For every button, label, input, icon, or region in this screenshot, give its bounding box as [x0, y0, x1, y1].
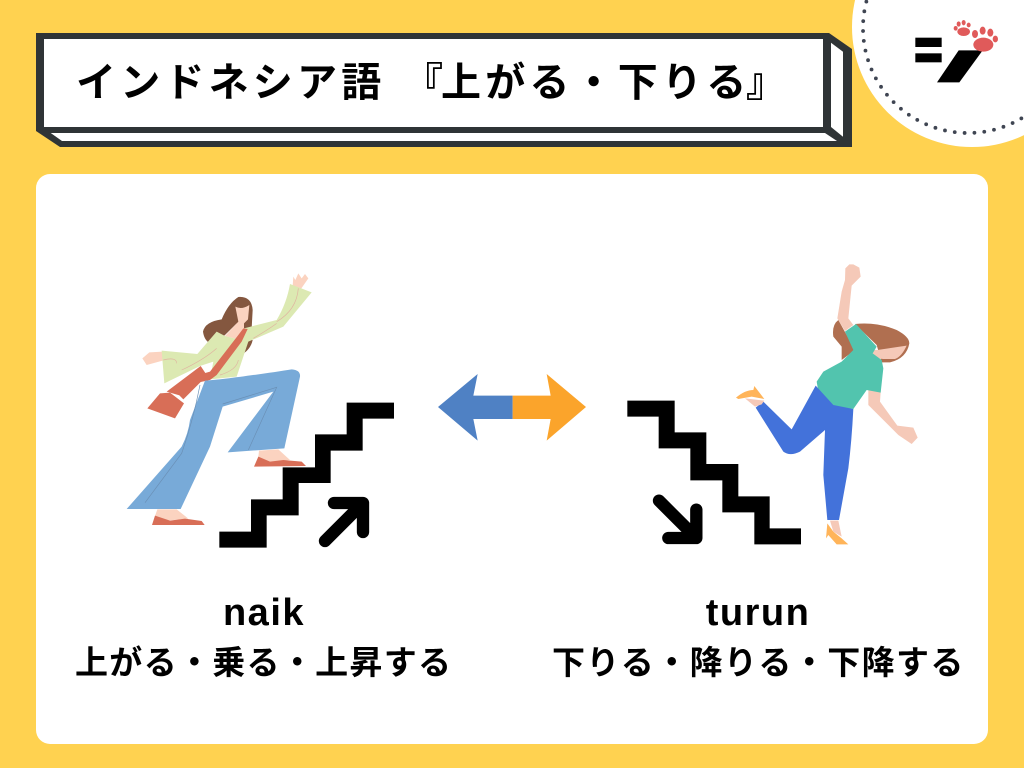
- label: naik: naik: [223, 592, 305, 634]
- meaning: turun: 下りる・降りる・下降する: [552, 644, 965, 681]
- logo badge: [852, 0, 1024, 147]
- double arrow: [438, 374, 586, 441]
- panel: main card: [36, 174, 988, 744]
- icon: stairs going down: [627, 401, 801, 544]
- label: turun: turun: [706, 592, 810, 634]
- arrow: down right: [659, 501, 696, 538]
- title text: 上がる・下りる: [441, 61, 750, 105]
- illustration: woman climbing: [127, 273, 312, 525]
- illustration: woman descending: [736, 264, 918, 544]
- title text: インドネシア語: [76, 61, 385, 105]
- title text: 』: [746, 61, 790, 105]
- icon: stairs going up: [219, 403, 394, 548]
- arrow: up right: [325, 503, 363, 541]
- title text: 『: [403, 61, 447, 105]
- title box: [36, 33, 852, 147]
- meaning: naik: 上がる・乗る・上昇する: [75, 644, 452, 681]
